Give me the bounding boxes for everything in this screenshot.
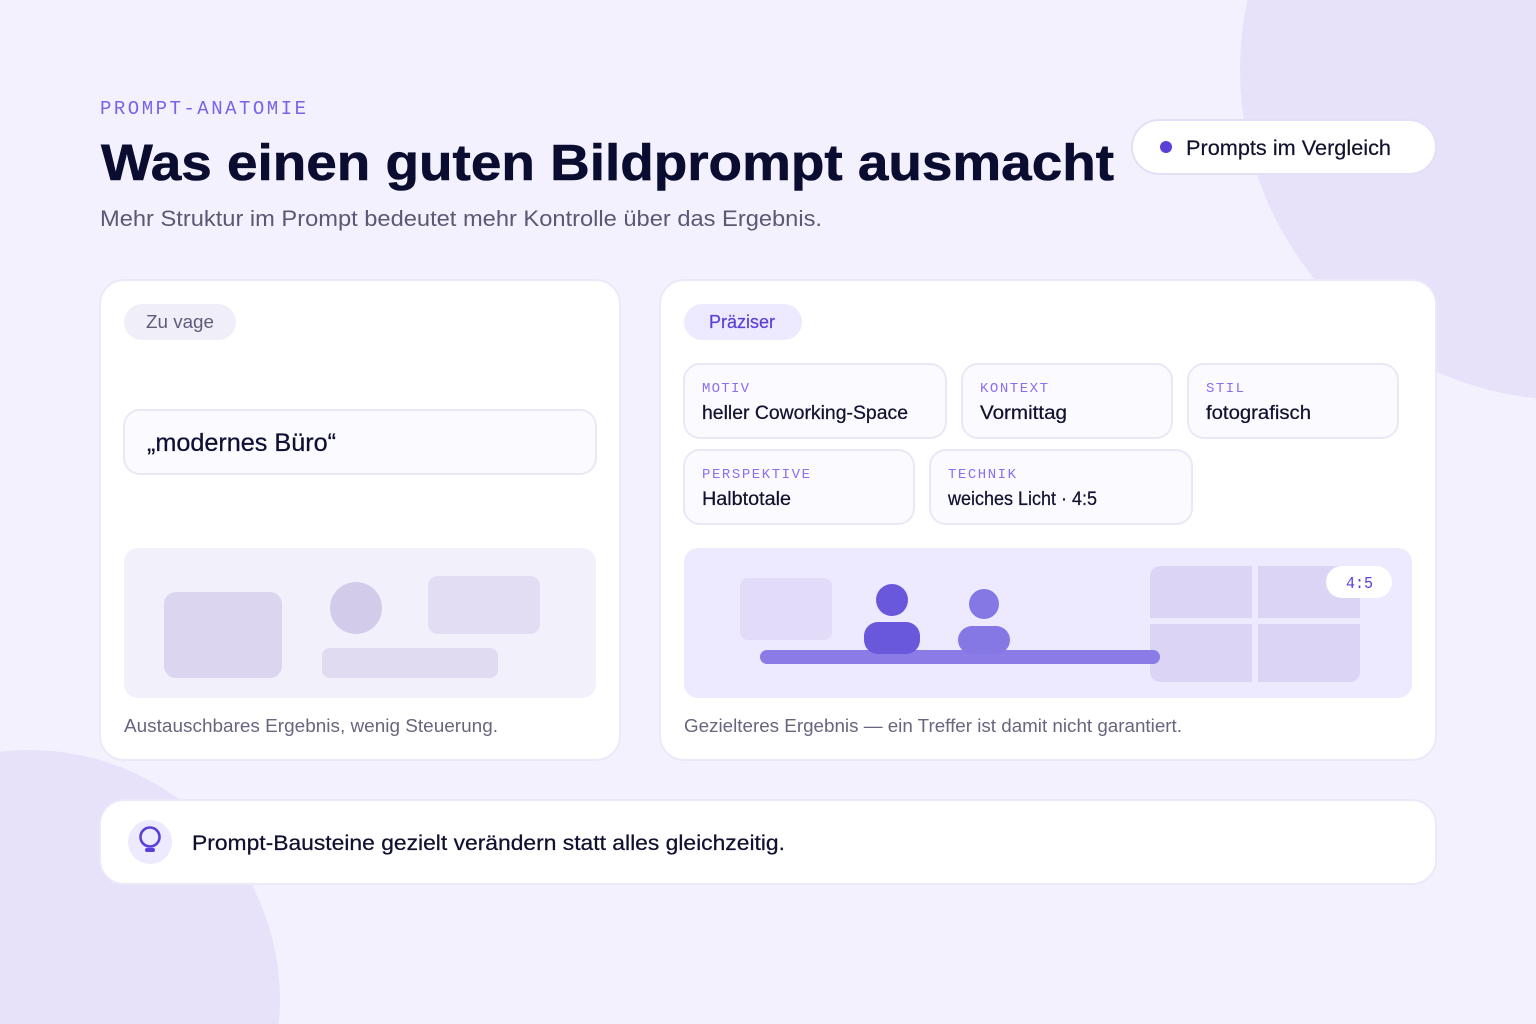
chip: Perspektive bbox=[684, 450, 914, 524]
chip: Stil: STIL bbox=[1206, 381, 1244, 397]
pill: Prompts im Vergleich: Prompts im Vergleich bbox=[1186, 137, 1391, 160]
tip text: Prompt-Bausteine gezielt verändern statt alles gleichzeitig. bbox=[192, 831, 785, 855]
badge: Präziser: Präziser bbox=[709, 312, 775, 332]
panel: präziser bbox=[660, 280, 1436, 760]
person 2 bbox=[958, 589, 1010, 654]
panel: tip bbox=[100, 800, 1436, 884]
pill: Prompts im Vergleich bbox=[1132, 120, 1436, 174]
title: Was einen guten Bildprompt ausmacht bbox=[101, 134, 1114, 191]
subtitle: Mehr Struktur im Prompt bedeutet mehr Kontrolle über das Ergebnis. bbox=[100, 206, 822, 231]
badge: Zu vage bbox=[124, 304, 236, 340]
chip: Motiv: heller Coworking-Space bbox=[702, 403, 908, 424]
chip: Stil bbox=[1188, 364, 1398, 438]
header eyebrow: PROMPT-ANATOMIE bbox=[100, 98, 306, 120]
prompt box: modernes Büro: „modernes Büro“ bbox=[147, 429, 336, 457]
badge: Präziser bbox=[684, 304, 802, 340]
chip: Motiv: MOTIV bbox=[702, 381, 750, 397]
chip: Motiv bbox=[684, 364, 946, 438]
ratio tag 4:5: 4:5 bbox=[1346, 575, 1373, 594]
chip: Kontext: Vormittag bbox=[980, 403, 1067, 424]
caption: right: Gezielteres Ergebnis — ein Treffer ist damit nicht garantiert. bbox=[684, 716, 1182, 736]
icon: light bulb bbox=[128, 820, 172, 864]
person 1 bbox=[864, 584, 920, 654]
badge: Zu vage: Zu vage bbox=[146, 312, 214, 332]
prompt box: modernes Büro bbox=[124, 410, 596, 474]
chip: Stil: fotografisch bbox=[1206, 403, 1311, 424]
chip: Technik: weiches Licht · 4:5 bbox=[947, 489, 1097, 510]
window bbox=[1150, 566, 1360, 682]
caption: left: Austauschbares Ergebnis, wenig Steuerung. bbox=[124, 716, 498, 736]
chip: Perspektive: PERSPEKTIVE bbox=[702, 467, 810, 483]
table bbox=[760, 650, 1160, 664]
chip: Kontext bbox=[962, 364, 1172, 438]
chip: Perspektive: Halbtotale bbox=[702, 489, 791, 510]
ratio tag 4:5 bbox=[1326, 566, 1392, 598]
chip: Technik bbox=[930, 450, 1192, 524]
chip: Kontext: KONTEXT bbox=[980, 381, 1048, 397]
panel: zu vage bbox=[100, 280, 620, 760]
illustration: generic result bbox=[124, 548, 596, 698]
chip: Technik: TECHNIK bbox=[948, 467, 1017, 483]
illustration: coworking scene bbox=[684, 548, 1412, 698]
